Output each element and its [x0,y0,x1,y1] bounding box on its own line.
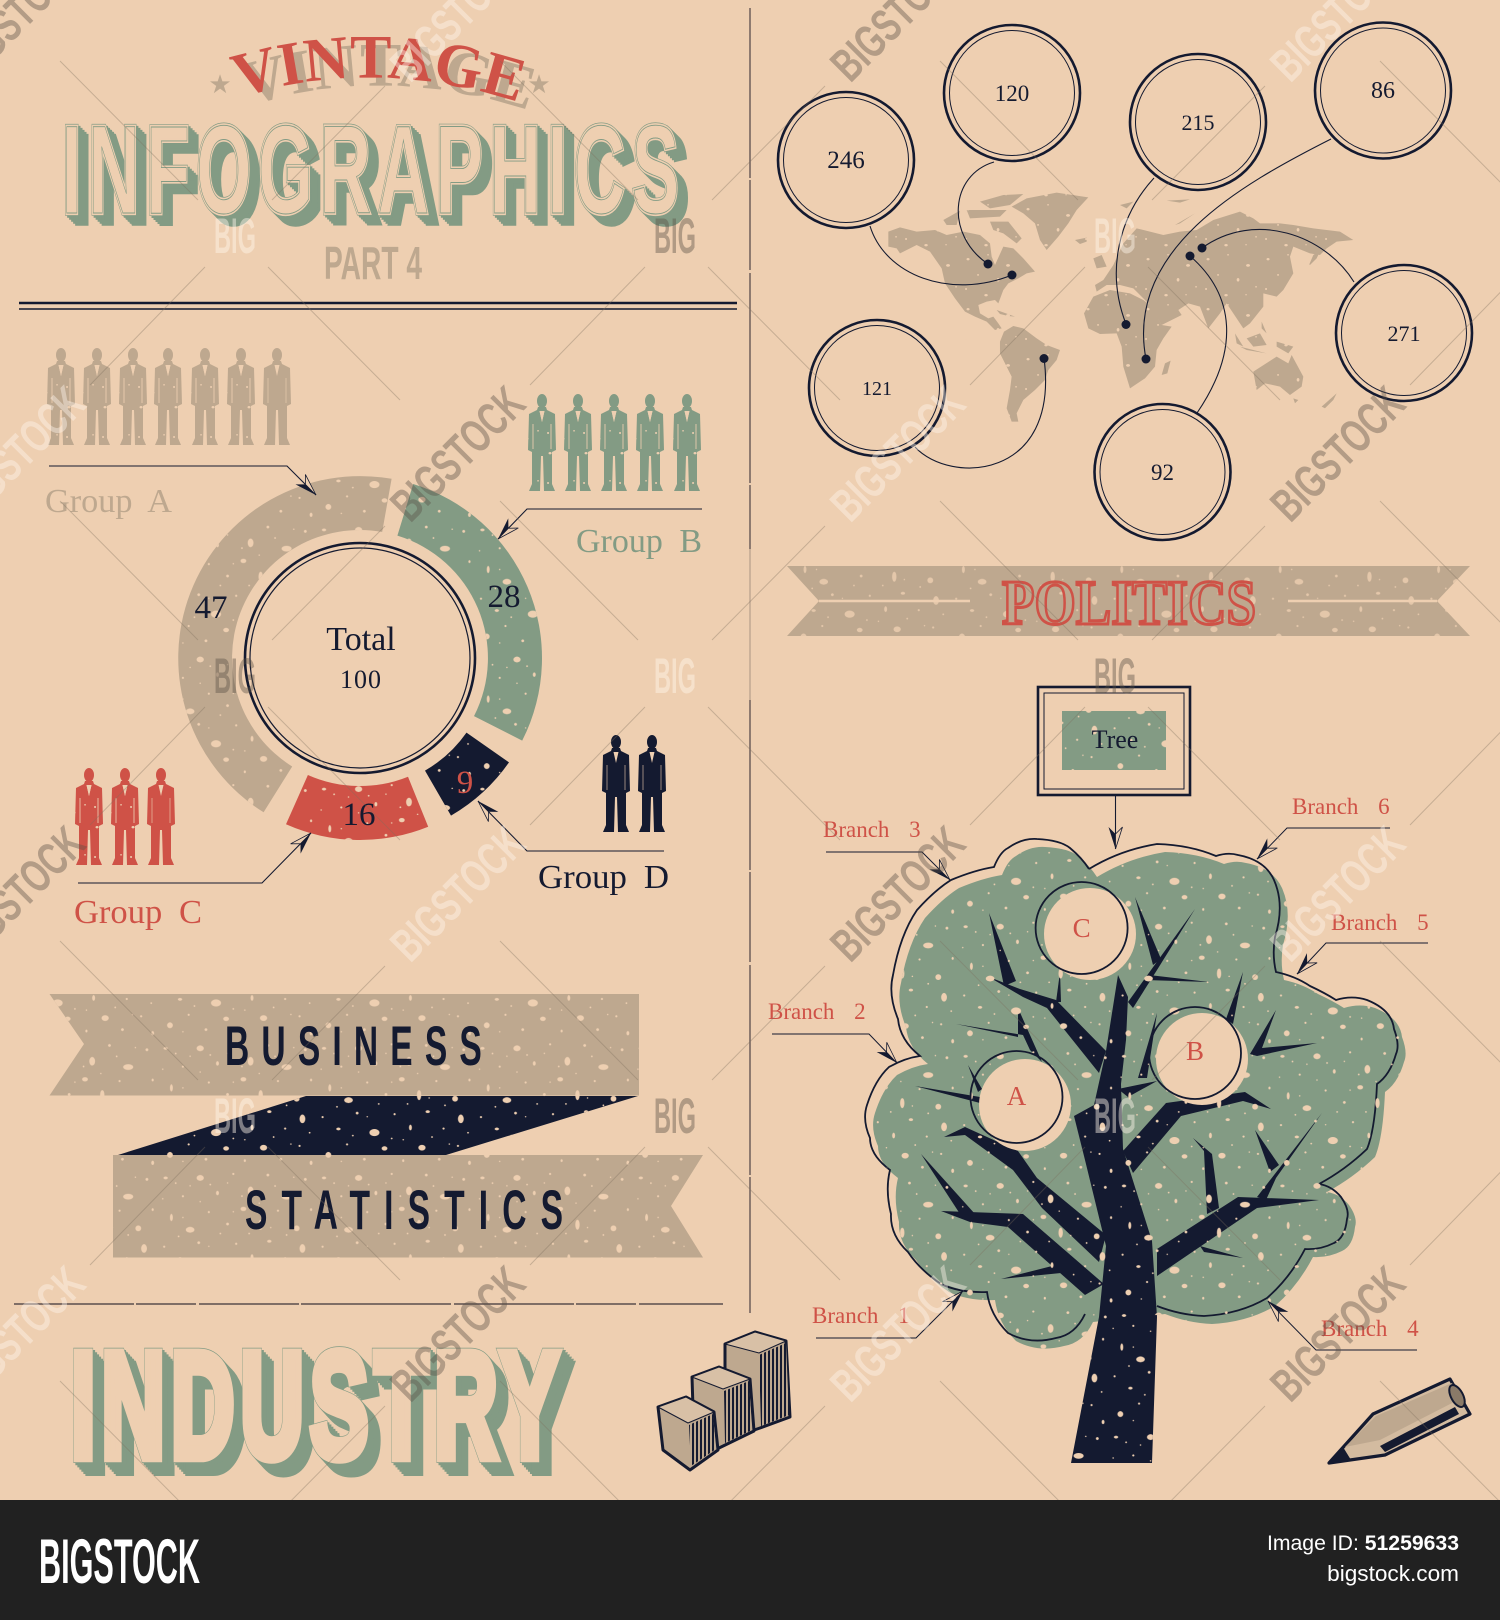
ribbon fold [118,1096,638,1155]
donut chart [178,476,542,840]
watermark: BIG marks: BIG [654,208,696,264]
circle B: B [1186,1036,1204,1066]
bubble: 271: 271 [1388,321,1420,346]
segment values: 28 [488,579,520,615]
title: Infographics: INFOGRAPHICS [70,109,694,248]
branch label 1: Branch 1 [812,1303,910,1328]
watermark: BIGSTOCK diagonals: BIGSTOCK [380,1256,535,1411]
bubble: 92 [1094,404,1230,540]
title: Infographics: INFOGRAPHICS [66,105,690,244]
branch label 3: Branch 3 [823,817,921,842]
label: group C: Group C [74,894,202,931]
segment: group B 28 [397,484,542,741]
bubble: 271 [1336,265,1472,401]
branch label 6 [1257,794,1390,859]
title: Vintage: ★ [208,70,232,100]
connector curves [870,139,1354,468]
watermark: BIG marks: BIG [214,1088,256,1144]
ribbon: business: BUSINESS [225,1014,482,1077]
trunk speckle [1071,1317,1157,1463]
divider above industry [14,1303,723,1305]
title: Infographics: INFOGRAPHICS [72,111,696,250]
title: Vintage: VINTAGE [248,45,534,109]
bubble: 86: 86 [1371,78,1395,104]
icon: pencil [1329,1379,1470,1463]
leader: group D [478,801,664,851]
branch label 4: Branch 4 [1321,1316,1419,1341]
title: Infographics [62,101,696,250]
watermark: BIGSTOCK diagonals: BIGSTOCK [1260,376,1415,531]
segment: group D 9 [425,733,509,816]
watermark: BIG marks: BIG [654,648,696,704]
watermark: BIGSTOCK diagonals: BIGSTOCK [1260,1256,1415,1411]
bubble: 121 [809,320,945,456]
watermark: BIGSTOCK diagonals: BIGSTOCK [820,1256,975,1411]
title: Industry: INDUSTRY [71,1321,565,1489]
watermark: BIG marks [214,208,1136,1144]
center total: Total [326,621,396,658]
icon: isometric bar blocks [658,1332,790,1470]
segment: group A 47 [178,476,392,812]
circle A: A [1007,1081,1027,1111]
text: BIG [1094,648,1136,704]
ribbon: statistics: STATISTICS [245,1178,563,1241]
figures: group C [75,768,175,865]
header rule [19,303,737,309]
branch label 5 [1297,910,1429,974]
title: Infographics: INFOGRAPHICS [62,101,686,240]
bubble: 121: 121 [862,378,892,400]
title: Industry: INDUSTRY [71,1321,565,1489]
figures: group D [602,735,666,832]
bubble: 215 [1130,54,1266,190]
segment: group C 16 [286,775,428,840]
branch label 6: Branch 6 [1292,794,1390,819]
segment values [194,579,520,833]
center total: 100 [340,665,382,694]
figures: group A [47,348,291,445]
watermark: BIGSTOCK diagonals: BIGSTOCK [380,376,535,531]
watermark: BIGSTOCK diagonals: BIGSTOCK [820,376,975,531]
branch label 2: Branch 2 [768,999,866,1024]
map speckle [888,190,1360,430]
circle C: C [1073,913,1091,943]
text: BIG [1094,1088,1136,1144]
title: Industry: INDUSTRY [81,1332,575,1500]
title: Industry: INDUSTRY [83,1334,577,1502]
footer bar [0,1500,1500,1620]
title: Vintage: VINTAGE [229,37,524,101]
ribbon: politics: POLITICS [1002,567,1256,638]
label: group D: Group D [538,859,669,896]
label: group B: Group B [576,523,702,560]
title: Industry: INDUSTRY [77,1328,571,1496]
footer bar: BIGSTOCK [39,1527,200,1597]
title: Infographics: INFOGRAPHICS [62,101,686,240]
title: Vintage: ★ [527,70,551,100]
title: Industry: INDUSTRY [79,1330,573,1498]
center total [245,543,475,773]
vertical divider [749,8,751,1313]
title: Industry [71,1321,577,1502]
segment values: 16 [342,797,376,833]
watermark: BIGSTOCK diagonals: BIGSTOCK [820,816,975,971]
branch label 5: Branch 5 [1331,910,1429,935]
canopy speckle [873,847,1406,1349]
title: Infographics: INFOGRAPHICS [62,101,686,240]
title: Infographics: INFOGRAPHICS [64,103,688,242]
leader: group C [78,833,311,883]
subtitle: Part 4: PART 4 [324,237,422,289]
watermark: BIGSTOCK diagonals: BIGSTOCK [380,816,535,971]
figures: group B [528,394,701,491]
ribbon: business statistics [50,994,703,1258]
bubble: 92: 92 [1151,460,1174,485]
leader: group B [498,509,702,539]
footer site: bigstock.com [1327,1561,1459,1586]
title: Infographics: INFOGRAPHICS [68,107,692,246]
segment values: 9 [457,765,473,801]
map: Americas [888,193,1088,422]
canopy [865,839,1406,1349]
label: group A: Group A [45,483,172,520]
ribbon: statistics [113,1155,703,1258]
segment values: 47 [194,590,228,626]
ribbon: politics [787,566,1470,638]
circle A [970,1051,1071,1151]
map location dots [984,244,1206,364]
tree [865,839,1406,1463]
watermark: BIG marks: BIG [654,1088,696,1144]
watermark: BIG marks: BIG [214,208,256,264]
map: Africa Eurasia Australia [1084,199,1353,408]
circle C [1036,882,1136,980]
branch label 2 [768,999,897,1063]
bubble: 120 [944,25,1080,161]
title: Industry: INDUSTRY [75,1325,569,1493]
bubble: 246 [778,92,914,228]
sign: tree [1038,687,1190,849]
sign: tree: Tree [1092,725,1138,754]
bubble: 86 [1315,22,1451,158]
branch label 4 [1268,1301,1419,1350]
bubble: 215: 215 [1182,110,1214,135]
bubble: 120: 120 [995,81,1029,106]
footer image id: Image ID: 51259633 [1267,1532,1459,1555]
branch label 3 [823,817,950,880]
leader: group A [49,466,316,495]
trunk and branches [915,897,1322,1463]
title: Industry: INDUSTRY [73,1323,567,1491]
branch label 1 [812,1291,963,1338]
bubble: 246: 246 [827,147,865,174]
watermark: BIG marks: BIG [214,648,256,704]
ribbon: business [50,994,639,1096]
circle B [1149,1007,1248,1105]
text: BIG [1094,208,1136,264]
world map [888,190,1360,430]
watermark: BIGSTOCK diagonals: BIGSTOCK [1260,816,1415,971]
